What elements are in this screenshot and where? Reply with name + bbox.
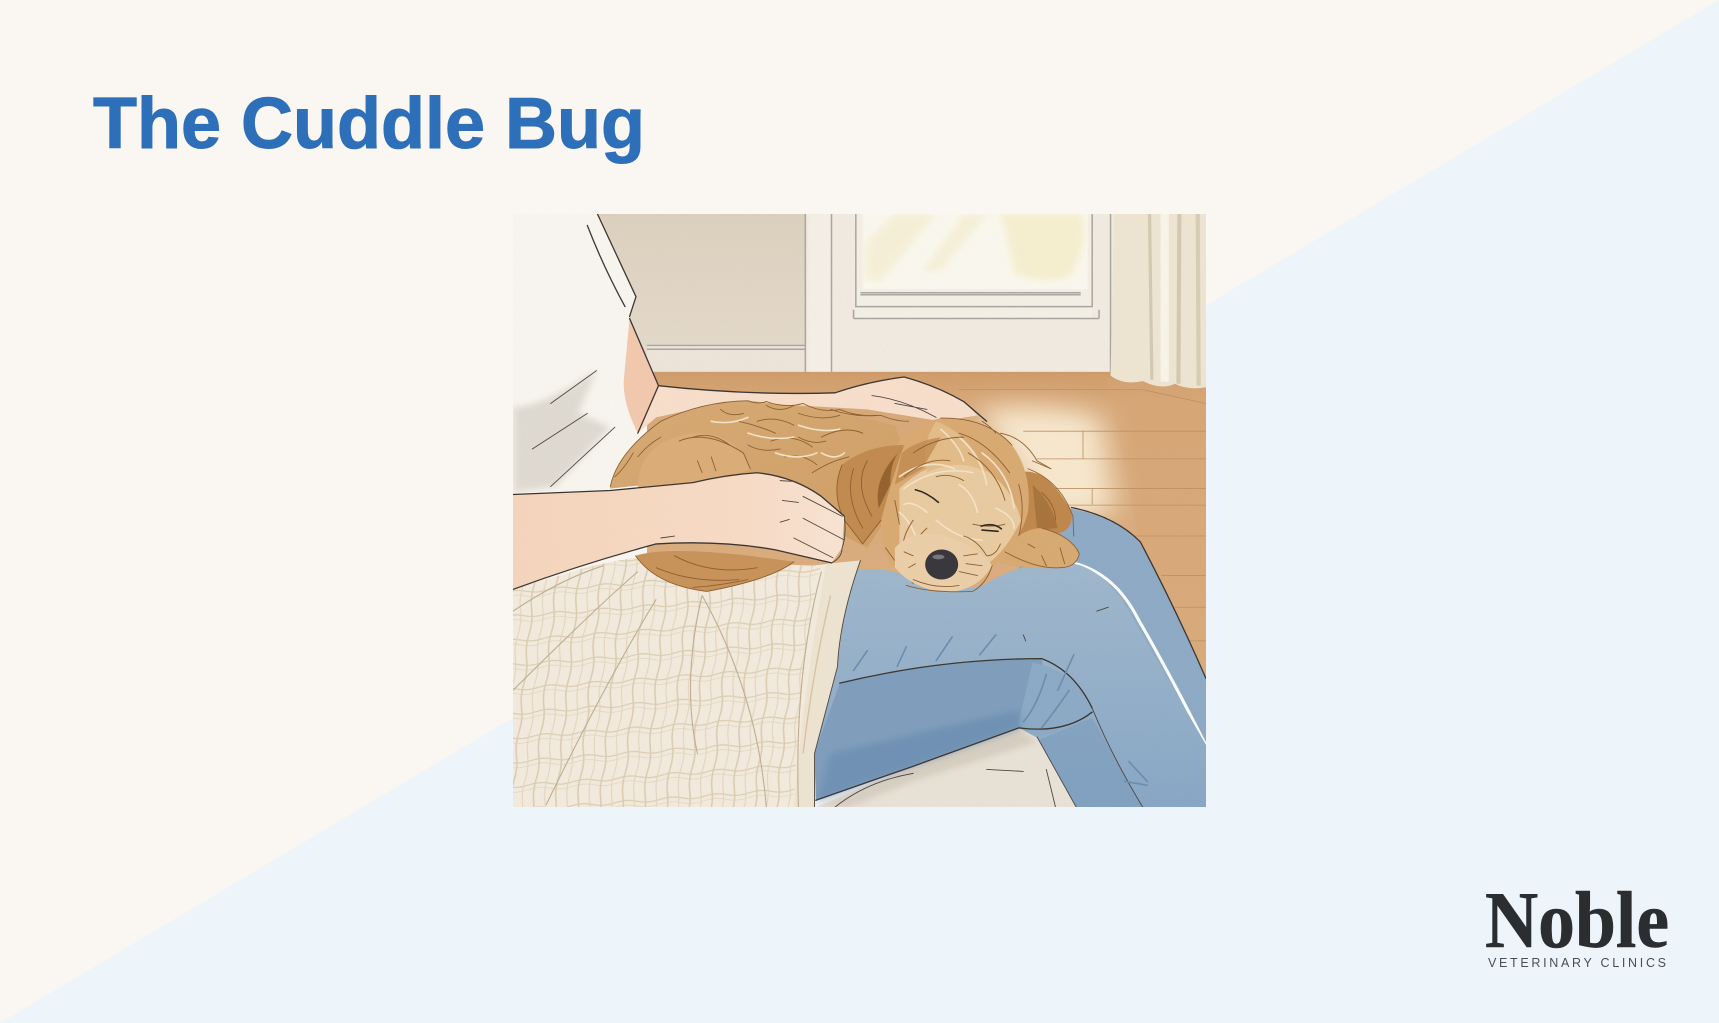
puppy muzzle (895, 534, 992, 592)
puppy body (610, 401, 913, 548)
puppy nose (925, 549, 958, 580)
wood floor (647, 372, 1206, 688)
shirt (513, 214, 638, 494)
title: The Cuddle Bug (93, 84, 645, 164)
puppy head (880, 418, 1029, 592)
puppy far ear (1010, 472, 1072, 544)
puppy paw (1000, 528, 1079, 568)
puppy near ear (837, 445, 904, 544)
far arm and hand stroking the head (624, 318, 987, 433)
puppy closed eyes (915, 490, 1001, 531)
far leg (1019, 508, 1206, 754)
logo: Noble Veterinary Clinics (1485, 880, 1669, 970)
door and window (805, 214, 1122, 373)
puppy rear fur (636, 551, 794, 591)
wall (513, 214, 811, 376)
near leg: jeans (815, 563, 1206, 807)
sofa seat (817, 728, 1078, 807)
logo tagline: VETERINARY CLINICS (1488, 956, 1666, 970)
blanket (513, 558, 860, 807)
curtain (1111, 214, 1206, 388)
illustration: sleeping puppy on a lap (513, 214, 1206, 807)
paper grain overlay (513, 214, 1206, 807)
puppy (610, 401, 1079, 592)
near arm and hand (513, 473, 845, 589)
